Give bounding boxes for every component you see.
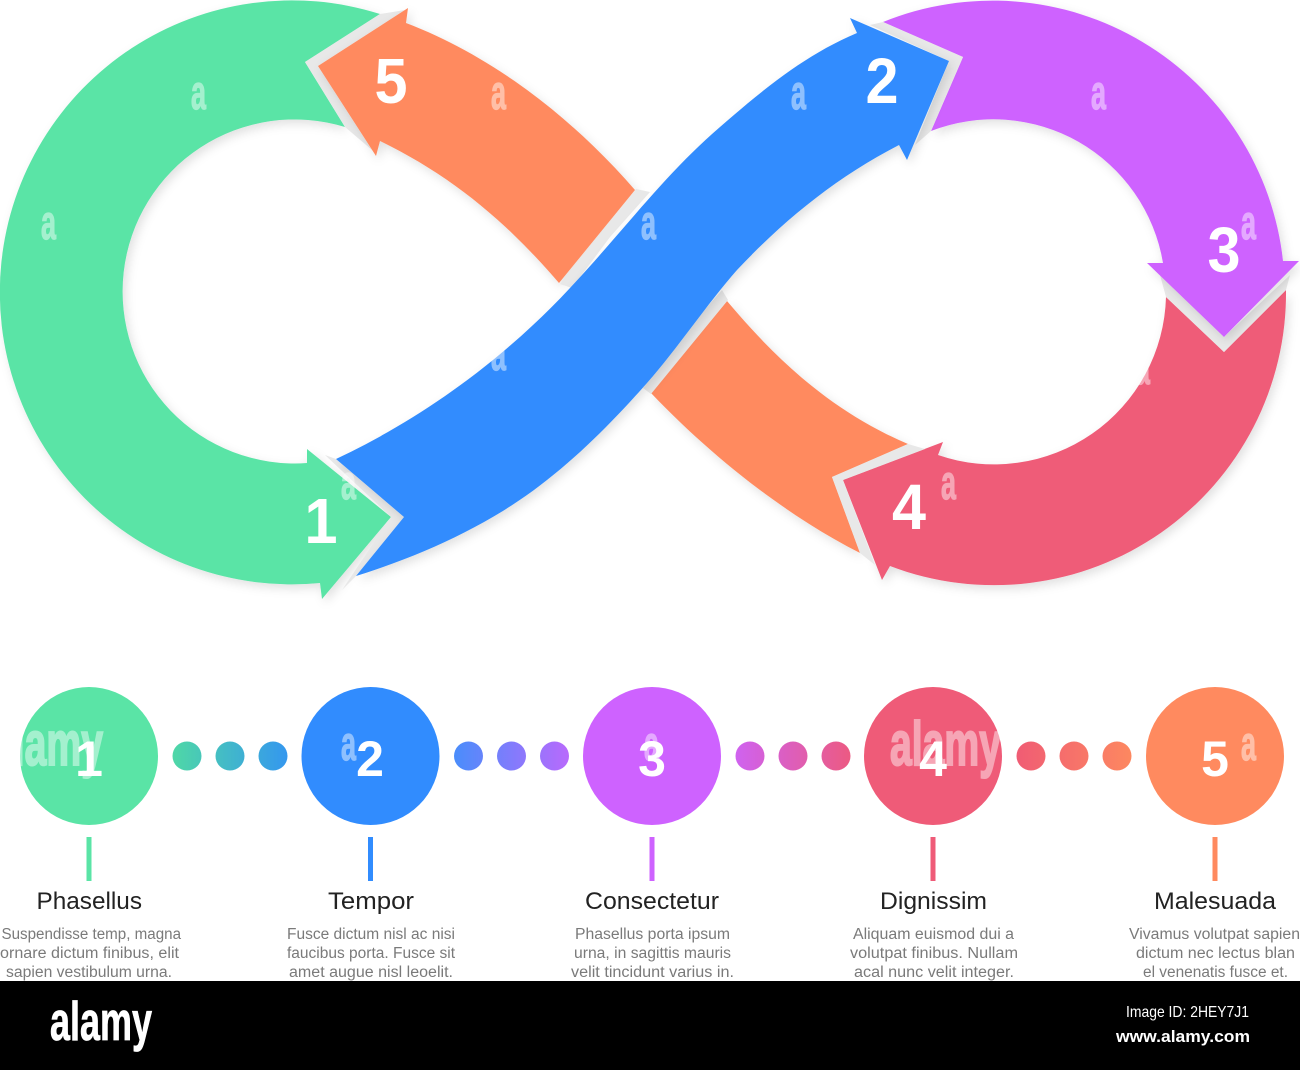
border: grey gap at arrow 5 tip [305,10,405,150]
text block: Consectetur: velit tincidunt varius in. [571,964,734,981]
step 5 circle: 5 [1201,731,1229,787]
watermark overlay: a [41,197,56,250]
text block: Phasellus [0,888,181,981]
text block: Dignissim: Aliquam euismod dui a [853,926,1014,943]
tick 2 [368,837,373,881]
tick 5 [1212,837,1218,881]
text block: Dignissim [850,888,1018,981]
connector dots 4 to 5 [1016,742,1132,770]
step 3 circle: 3 [638,731,666,787]
infinity loop diagram [0,0,1299,599]
watermark overlay [0,67,1256,779]
text block: Malesuada: dictum nec lectus blan [1136,945,1295,962]
border: grey gap at arrow 4 tip [832,444,925,565]
text block: Dignissim: acal nunc velit integer. [854,964,1014,981]
text block: Phasellus: Suspendisse temp, magna [2,926,181,943]
number 2: 2 [866,45,898,117]
text block: Phasellus: Phasellus [36,888,142,915]
step 5 circle [1146,687,1284,825]
watermark overlay: a [341,718,356,771]
text block: Tempor: faucibus porta. Fusce sit [287,945,456,962]
connector dots 2 to 3 [454,742,569,770]
text block: Malesuada: Malesuada [1154,888,1277,915]
border: grey gap at upper blue edge [560,189,650,288]
text block: Dignissim: Dignissim [880,888,987,915]
number 1: 1 [304,485,338,557]
watermark overlay: a [1091,67,1106,120]
step 1 circle: 1 [75,731,103,787]
watermark overlay: a [191,67,206,120]
border: grey gap at lower blue edge [643,290,728,394]
footer bar [0,981,1300,1070]
text block: Tempor: amet augue nisl leoelit. [289,964,453,981]
text block: Consectetur: Phasellus porta ipsum [575,926,730,943]
watermark overlay: a [941,457,956,510]
segment 5: orange arrow [318,8,635,283]
watermark overlay: alamy [890,710,1001,779]
tick 1 [86,837,92,881]
watermark overlay: a [491,67,506,120]
text block: Tempor: Tempor [328,888,414,915]
watermark overlay: a [1241,718,1256,771]
text block: Phasellus: sapien vestibulum urna. [6,964,172,981]
connector dots 3 to 4 [736,742,850,770]
watermark overlay: a [641,197,656,250]
step 4 circle [864,687,1002,825]
segment 3: purple arrow [883,1,1299,337]
watermark overlay: a [491,328,506,381]
segment: orange lower band [651,301,908,553]
footer logo: alamy [50,990,152,1052]
step 1 circle [20,687,158,825]
text block: Malesuada: Vivamus volutpat sapien [1129,926,1300,943]
text block: Tempor [287,888,456,981]
step 3 circle [583,687,721,825]
number 5: 5 [374,45,408,117]
text block: Dignissim: volutpat finibus. Nullam [850,945,1018,962]
watermark overlay: a [341,457,356,510]
number 3: 3 [1208,214,1240,286]
watermark overlay: a [791,67,806,120]
step 4 circle: 4 [919,731,947,787]
number 4: 4 [892,471,926,543]
step 2 circle [302,687,440,825]
footer image id: Image ID: 2HEY7J1 [1126,1004,1249,1021]
watermark overlay: a [644,718,659,771]
text block: Consectetur [571,888,734,981]
segment 4: red arrow [843,290,1286,585]
tick 4 [930,837,936,881]
segment 1: green arrow [0,0,391,599]
watermark overlay: a [1135,342,1150,395]
tick 3 [650,837,654,881]
text block: Malesuada [1129,888,1300,981]
text block: Phasellus: ornare dictum finibus, elit [0,945,180,962]
step 2 circle: 2 [356,731,384,787]
text block: Consectetur: Consectetur [585,888,719,915]
text block: Consectetur: urna, in sagittis mauris [574,945,731,962]
footer url: www.alamy.com [1115,1027,1250,1046]
segment 2: blue arrow [336,18,949,576]
border: grey gap at arrow 2 tip [870,22,963,145]
text block: Tempor: Fusce dictum nisl ac nisi [287,926,455,943]
border: grey gap at arrow 1 tip [325,455,404,590]
watermark overlay: a [1241,197,1256,250]
text block: Malesuada: el venenatis fusce et. [1143,964,1288,981]
border: grey gap at arrow 3 tip [1160,275,1290,352]
connector dots 1 to 2 [172,742,288,770]
